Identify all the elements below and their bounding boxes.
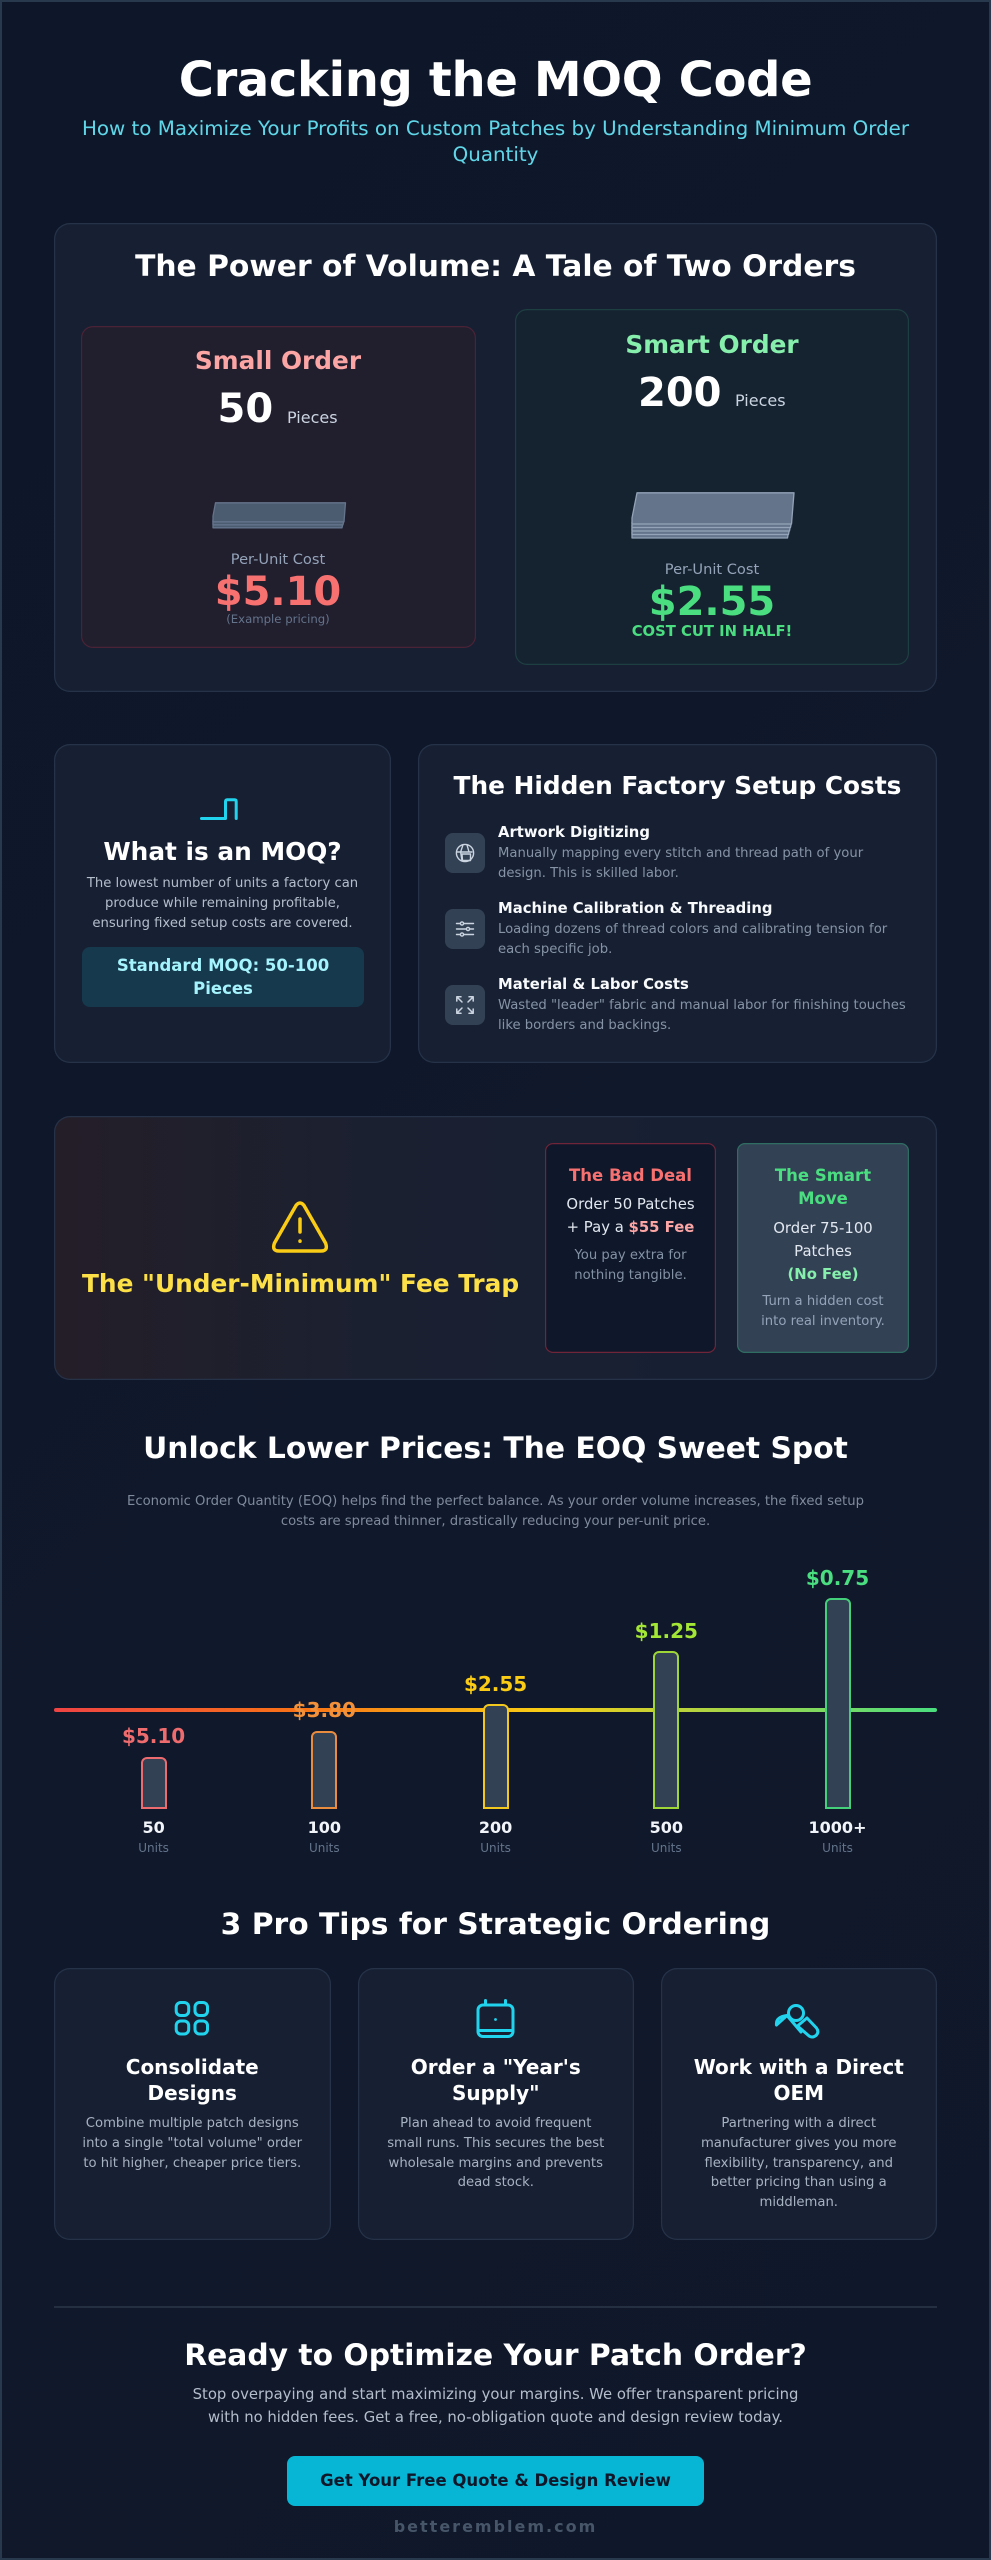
machine calibration text: Loading dozens of thread colors and calibrating tension for [498, 922, 887, 937]
title: Cracking the MOQ Code [179, 52, 812, 108]
machine calibration text [498, 922, 888, 957]
tip text: Combine multiple patch designs [86, 2116, 299, 2131]
quantity: 50 units: 50 [142, 1818, 165, 1837]
artwork digitizing text [498, 846, 864, 881]
tip text: small runs. This secures the best [387, 2136, 604, 2151]
CTA text: Stop overpaying and start maximizing your margins. We offer transparent pricing [193, 2385, 798, 2403]
tip title: Work with a Direct [694, 2055, 904, 2079]
icon: expand arrows [445, 985, 485, 1025]
unit label: 100 units: Units [309, 1841, 340, 1855]
panel: tip consolidate designs [54, 1968, 330, 2240]
smart move offer: Patches [794, 1242, 852, 1260]
tip title: Consolidate [126, 2055, 259, 2079]
bar: 500 units [653, 1651, 679, 1809]
fee trap heading: The "Under-Minimum" Fee Trap [82, 1269, 519, 1298]
smart move title: Move [798, 1189, 848, 1208]
quantity: 200 units: 200 [479, 1818, 512, 1837]
bar: 50 units [141, 1757, 167, 1809]
bad deal title: The Bad Deal [569, 1166, 692, 1184]
column: 500 units [635, 1619, 698, 1855]
subtitle: How to Maximize Your Profits on Custom Patches by Understanding Minimum Order [82, 117, 909, 140]
EOQ description [127, 1494, 864, 1529]
tip text: flexibility, transparency, and [704, 2156, 893, 2171]
smart order savings note: COST CUT IN HALF! [632, 623, 792, 640]
small order price: $5.10 [215, 568, 341, 614]
panel: the smart move [737, 1143, 909, 1353]
bad deal note: nothing tangible. [574, 1268, 687, 1283]
smart move offer: Order 75-100 [773, 1218, 873, 1236]
badge text: Pieces [193, 979, 253, 998]
tip title [126, 2055, 259, 2105]
price: 1000+ units: $0.75 [806, 1566, 869, 1590]
panel: hidden factory setup costs [418, 744, 937, 1063]
material and labor text: like borders and backings. [498, 1018, 671, 1033]
panel: tip year's supply [358, 1968, 634, 2240]
tip text: manufacturer gives you more [701, 2136, 897, 2151]
tip text: better pricing than using a [711, 2175, 887, 2190]
unit label: 200 units: Units [480, 1841, 511, 1855]
heading: EOQ: Unlock Lower Prices: The EOQ Sweet Spot [143, 1431, 848, 1466]
badge text [117, 956, 329, 998]
tip text [387, 2116, 604, 2190]
heading: what is an MOQ: What is an MOQ? [103, 837, 342, 866]
smart order unit label: Pieces [735, 391, 786, 410]
website: betteremblem.com [394, 2517, 597, 2536]
tip title: Supply" [452, 2081, 540, 2105]
tip text [82, 2116, 302, 2171]
MOQ definition: ensuring fixed setup costs are covered. [92, 916, 353, 931]
unit label: 50 units: Units [138, 1841, 169, 1855]
section: call to action [184, 2338, 807, 2536]
column: 1000+ units [806, 1566, 869, 1855]
bad deal note [574, 1248, 687, 1283]
MOQ definition: The lowest number of units a factory can [87, 876, 358, 891]
small order quantity: 50 [218, 386, 273, 432]
icon: step line [200, 798, 238, 820]
panel: power of volume [54, 223, 937, 692]
smart order cost label: Per-Unit Cost [665, 561, 759, 578]
bad deal offer [566, 1195, 695, 1236]
small order cost label: Per-Unit Cost [231, 551, 325, 568]
tip text: into a single "total volume" order [82, 2136, 302, 2151]
small order unit label: Pieces [287, 408, 338, 427]
smart move title [774, 1166, 871, 1208]
price: 200 units: $2.55 [464, 1672, 527, 1696]
column: 100 units [293, 1698, 356, 1855]
tip text: dead stock. [458, 2175, 534, 2190]
panel: smart order [515, 309, 909, 665]
bar: 1000+ units [824, 1598, 850, 1809]
small order footnote: (Example pricing) [226, 612, 330, 626]
tip title [694, 2055, 904, 2105]
EOQ description: Economic Order Quantity (EOQ) helps find the perfect balance. As your order volume increases, the fixed setup [127, 1494, 864, 1509]
subtitle [82, 117, 910, 166]
smart move note [761, 1294, 885, 1329]
section: EOQ sweet spot [54, 1431, 937, 1855]
smart order title: Smart Order [625, 330, 799, 359]
unit label: 500 units: Units [651, 1841, 682, 1855]
smart move note: into real inventory. [761, 1314, 885, 1329]
panel: what is an MOQ [54, 744, 391, 1063]
bar: 200 units [483, 1704, 509, 1809]
artwork digitizing text: design. This is skilled labor. [498, 866, 679, 881]
CTA button: Get Your Free Quote & Design Review [320, 2471, 671, 2490]
bad deal offer: Order 50 Patches [566, 1195, 695, 1213]
price: 50 units: $5.10 [122, 1724, 185, 1748]
standard MOQ badge [82, 947, 364, 1007]
icon: calendar [476, 1999, 514, 2038]
EOQ description: costs are spread thinner, drastically reducing your per-unit price. [281, 1514, 710, 1529]
row: artwork digitizing [445, 824, 864, 881]
column: 200 units [464, 1672, 527, 1855]
icon: grid [174, 2001, 209, 2036]
bar chart: price by order volume [54, 1566, 937, 1855]
panel: the bad deal [545, 1143, 716, 1353]
column: 50 units [122, 1724, 185, 1855]
bar: 100 units [311, 1731, 337, 1809]
price gradient line [54, 1708, 937, 1712]
icon: large patch stack [631, 492, 795, 539]
tip text [701, 2116, 897, 2210]
icon: warning triangle [272, 1201, 328, 1253]
tip title [411, 2055, 581, 2105]
CTA text [193, 2385, 798, 2426]
panel: tip direct OEM [660, 1968, 937, 2240]
tip text: middleman. [759, 2195, 838, 2210]
smart move note: Turn a hidden cost [762, 1294, 884, 1309]
tip title: OEM [773, 2081, 824, 2105]
tip title: Order a "Year's [411, 2055, 581, 2079]
machine calibration title: Machine Calibration & Threading [498, 900, 772, 917]
panel: under-minimum fee trap [54, 1116, 937, 1380]
icon: artwork digitizing [445, 833, 485, 873]
machine calibration text: each specific job. [498, 942, 612, 957]
icon: small patch stack [212, 502, 346, 528]
price: 500 units: $1.25 [635, 1619, 698, 1643]
smart move offer [773, 1218, 873, 1283]
MOQ definition [86, 876, 358, 931]
bad deal note: You pay extra for [574, 1248, 687, 1263]
heading: pro tips: 3 Pro Tips for Strategic Ordering [221, 1907, 770, 1942]
badge text: Standard MOQ: 50-100 [117, 956, 329, 974]
subtitle: Quantity [453, 143, 538, 166]
icon: tools [774, 2004, 820, 2038]
artwork digitizing text: Manually mapping every stitch and thread path of your [498, 846, 863, 861]
material and labor title: Material & Labor Costs [498, 976, 689, 993]
icon: sliders [445, 909, 485, 949]
tip text: Plan ahead to avoid frequent [400, 2116, 591, 2131]
smart move offer: (No Fee) [787, 1265, 859, 1283]
quantity: 100 units: 100 [308, 1818, 341, 1837]
quantity: 500 units: 500 [650, 1818, 683, 1837]
material and labor text [498, 998, 906, 1033]
CTA heading: Ready to Optimize Your Patch Order? [184, 2338, 807, 2373]
bad deal offer: + Pay a $55 Fee [567, 1218, 694, 1236]
smart move title: The Smart [775, 1166, 871, 1184]
material and labor text: Wasted "leader" fabric and manual labor for finishing touches [498, 998, 906, 1013]
CTA text: with no hidden fees. Get a free, no-obligation quote and design review today. [208, 2408, 783, 2426]
quantity: 1000+ units: 1000+ [809, 1818, 866, 1837]
CTA button [287, 2456, 704, 2506]
small order title: Small Order [195, 346, 361, 375]
artwork digitizing title: Artwork Digitizing [498, 824, 650, 841]
tip text: wholesale margins and prevents [389, 2156, 603, 2171]
price: 100 units: $3.80 [293, 1698, 356, 1722]
smart order price: $2.55 [649, 579, 775, 625]
smart order quantity: 200 [638, 370, 722, 416]
MOQ definition: produce while remaining profitable, [105, 896, 340, 911]
unit label: 1000+ units: Units [822, 1841, 853, 1855]
tip text: Partnering with a direct [721, 2116, 876, 2131]
row: machine calibration [445, 900, 888, 957]
panel: small order [81, 326, 476, 648]
tip text: to hit higher, cheaper price tiers. [83, 2156, 301, 2171]
heading: hidden costs: The Hidden Factory Setup Costs [454, 771, 901, 800]
heading: two orders: The Power of Volume: A Tale of Two Orders [135, 248, 856, 284]
tip title: Designs [148, 2081, 237, 2105]
row: material and labor [445, 976, 906, 1033]
